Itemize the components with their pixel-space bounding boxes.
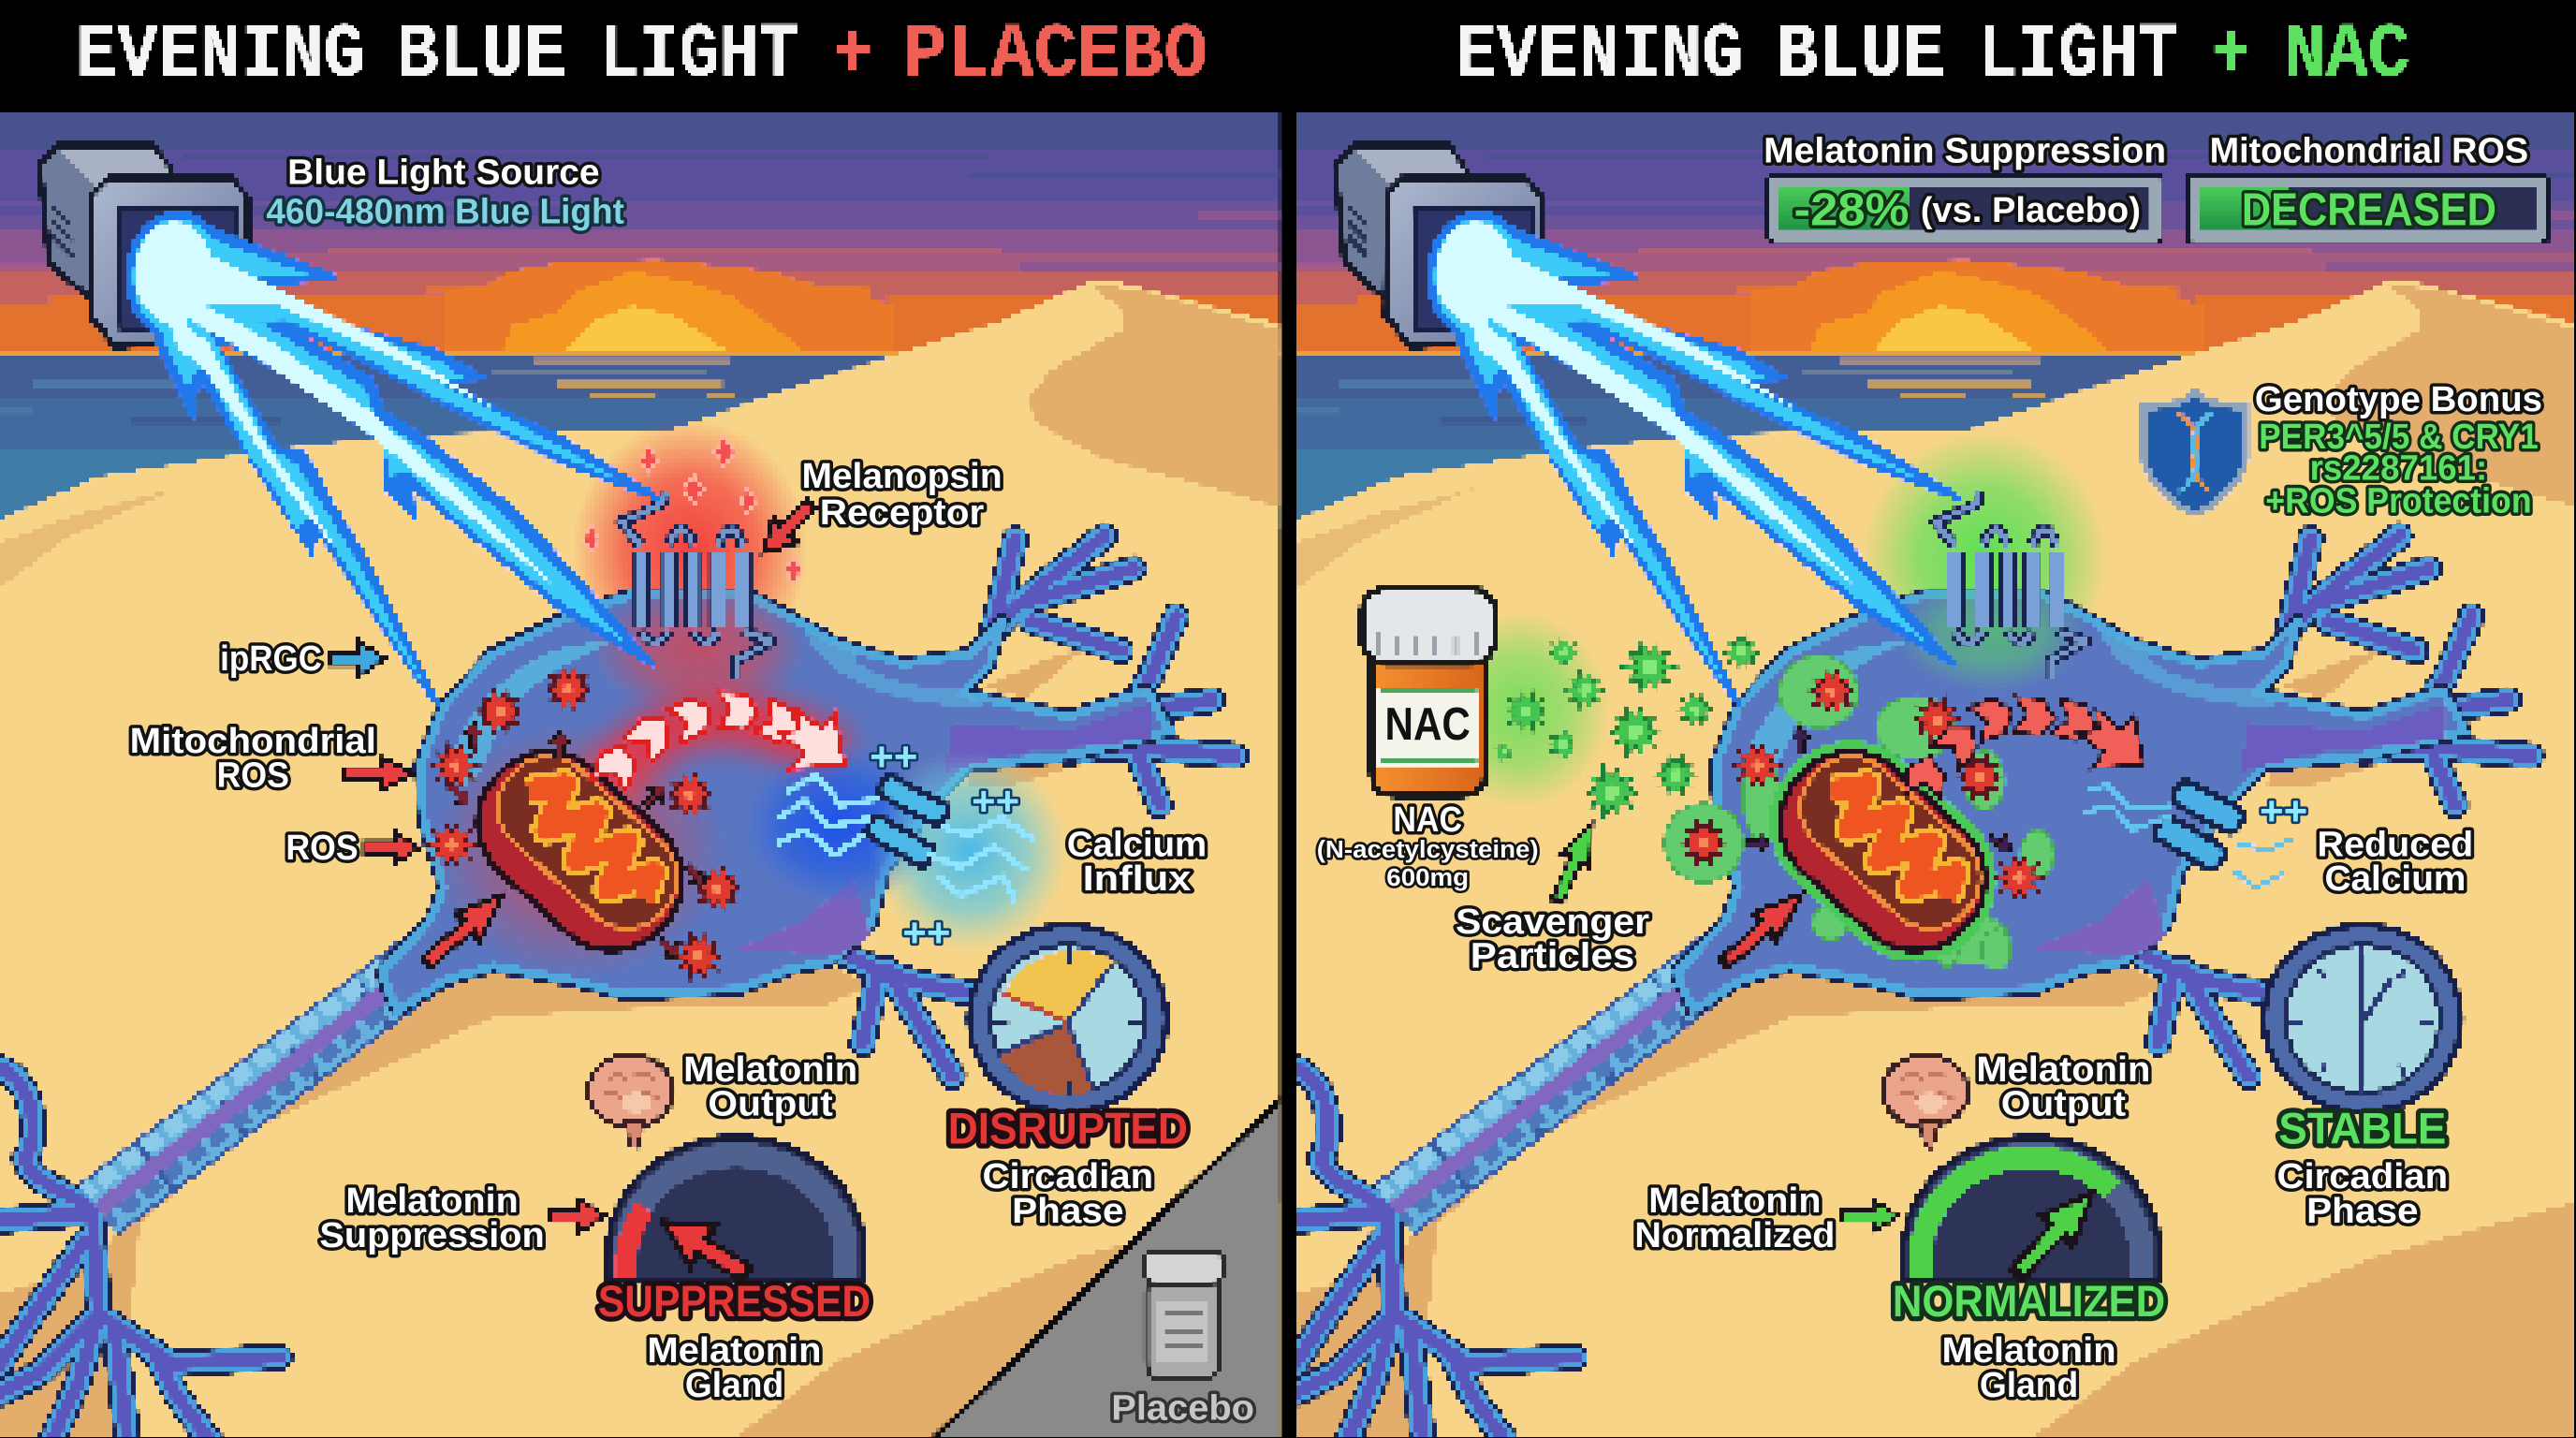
label: melatonin output: Melatonin (1976, 1049, 2150, 1089)
calcium channel (2152, 778, 2247, 873)
calcium ions: ++ (870, 734, 917, 780)
NAC scavenger blobs (1664, 655, 2054, 970)
label: genotype bonus: PER3^5/5 & CRY1 (2259, 417, 2539, 456)
calcium ions: ++ (902, 910, 950, 956)
melatonin gauge: suppressed (607, 1137, 864, 1293)
title: placebo panel: PLACEBO (903, 11, 1208, 99)
label: scavenger particles: Particles (1471, 936, 1634, 976)
callout arrows (330, 492, 825, 1232)
label: melanopsin receptor: Receptor (820, 492, 985, 532)
right panel: evening blue light + NAC (1258, 11, 2576, 1438)
label: NAC dose: NAC (1393, 800, 1462, 839)
calcium channel (863, 773, 951, 870)
sand dunes (0, 283, 1298, 1438)
scene artwork: NAC (1258, 98, 2576, 1438)
title: NAC panel: LIGHT (1978, 11, 2178, 99)
sand dunes (1281, 283, 2576, 1438)
label: calcium influx (1067, 824, 1207, 898)
label: melatonin output (683, 1049, 857, 1123)
scavenger particles (1494, 635, 1760, 817)
label: placebo: Placebo (1111, 1387, 1254, 1427)
label: reduced calcium: Reduced (2318, 824, 2473, 863)
sunset sky and sea (1258, 98, 2576, 531)
label: blue light source: Blue Light Source (287, 153, 600, 192)
label: genotype bonus (2255, 379, 2542, 521)
melanopsin receptor (1936, 490, 2086, 677)
status bars (1767, 174, 2548, 243)
dark arrows (1745, 726, 2017, 858)
label: circadian phase (2277, 1156, 2448, 1230)
label: reduced calcium: Calcium (2324, 858, 2466, 898)
label: circadian phase: Circadian (983, 1156, 1153, 1196)
label: mitochondrial ROS: Mitochondrial (130, 721, 376, 760)
label: genotype bonus: +ROS Protection (2265, 481, 2532, 521)
title: NAC panel: NAC (2284, 11, 2410, 99)
red chevron arrow arc (593, 693, 866, 793)
reduced calcium waves (2082, 785, 2291, 888)
label: ROS: ROS (285, 828, 359, 867)
melanopsin receptor red glow (576, 421, 805, 609)
label: melatonin suppression stat: -28% (1794, 184, 1909, 235)
sunset sky and sea (0, 98, 1331, 531)
label: circadian phase (983, 1156, 1153, 1230)
mitochondrion (1753, 726, 2012, 977)
label: blue light source (266, 153, 624, 231)
title: placebo panel (76, 11, 1208, 99)
label: melatonin suppression: Suppression (319, 1215, 545, 1255)
label: mitochondrial ROS: ROS (217, 756, 289, 795)
title: NAC panel (1456, 11, 2410, 99)
placebo corner (929, 1094, 1284, 1438)
red stress glow inside soma (431, 583, 838, 979)
calcium ions (870, 734, 1019, 956)
label: melatonin gland (1942, 1330, 2116, 1404)
reduced red arrow arc (1904, 694, 2165, 800)
label: melatonin normalized: Normalized (1634, 1215, 1835, 1255)
badge: normalized: NORMALIZED (1893, 1277, 2165, 1327)
neutralized ROS (1680, 670, 2042, 900)
bottle label: NAC: NAC (1385, 699, 1471, 750)
melanopsin receptor green glow (1862, 431, 2108, 687)
circadian clock: disrupted (970, 925, 1166, 1112)
calcium ions reduced: ++ (2260, 788, 2307, 834)
label: circadian phase: Phase (1012, 1191, 1123, 1230)
green receptor tint inside soma (1895, 574, 2086, 692)
label: melatonin suppression (319, 1181, 545, 1255)
label: genotype bonus: Genotype Bonus (2255, 379, 2542, 418)
label: melanopsin receptor (801, 456, 1003, 532)
label: reduced calcium (2318, 824, 2473, 898)
brain icon (1882, 1055, 1969, 1149)
calcium ions: ++ (972, 779, 1019, 825)
label: melatonin gland: Melatonin (1942, 1330, 2116, 1370)
title: placebo panel: LIGHT (600, 11, 798, 99)
label: genotype bonus: rs2287161: (2310, 448, 2487, 487)
label: mitochondrial ROS stat: DECREASED (2242, 184, 2496, 235)
ROS particles (429, 667, 741, 978)
placebo bottle (1144, 1251, 1224, 1380)
label: scavenger particles (1456, 902, 1649, 976)
label: melatonin output (1976, 1049, 2150, 1123)
label: scavenger particles: Scavenger (1456, 902, 1649, 941)
label: melatonin output: Output (708, 1084, 833, 1123)
ipRGC neuron (0, 536, 1236, 1438)
label: melatonin suppression stat: Melatonin Suppression (1764, 131, 2166, 170)
badge: disrupted: DISRUPTED (948, 1105, 1188, 1154)
label: melatonin suppression stat: (vs. Placebo) (1921, 190, 2141, 229)
title: placebo panel: EVENING (76, 11, 365, 99)
circadian clock: stable (2264, 925, 2461, 1112)
mitochondrion (473, 749, 683, 955)
blue light source (39, 144, 248, 346)
brain icon (588, 1055, 674, 1149)
genotype shield (2144, 388, 2246, 514)
label: melatonin output: Melatonin (683, 1049, 857, 1089)
melanopsin receptor (621, 490, 772, 677)
label: melatonin normalized: Melatonin (1648, 1181, 1822, 1220)
label: melatonin normalized (1634, 1181, 1835, 1255)
label: mitochondrial ROS (130, 721, 376, 795)
calcium waves (775, 775, 1035, 901)
title: NAC panel: EVENING (1456, 11, 1743, 99)
label: melatonin gland: Gland (685, 1365, 783, 1404)
scene artwork: placebo (0, 98, 1331, 1438)
label: NAC dose: 600mg (1386, 863, 1469, 891)
title: NAC panel: BLUE (1776, 11, 1945, 99)
label: melatonin gland: Melatonin (648, 1330, 822, 1370)
left panel: evening blue light + placebo (0, 11, 1331, 1438)
blue light beams (1429, 213, 1962, 707)
label: melatonin gland (648, 1330, 822, 1404)
label: circadian phase: Phase (2306, 1191, 2419, 1230)
label: ipRGC: ipRGC (220, 638, 322, 678)
title: NAC panel: + (2211, 11, 2250, 99)
label: calcium influx: Influx (1083, 858, 1191, 898)
NAC bottle (1362, 588, 1610, 809)
label: melanopsin receptor: Melanopsin (801, 456, 1003, 495)
label: melatonin suppression: Melatonin (345, 1181, 519, 1220)
label: melatonin gland: Gland (1980, 1365, 2078, 1404)
label: circadian phase: Circadian (2277, 1156, 2448, 1196)
title: placebo panel: BLUE (396, 11, 567, 99)
receptor sparkles (583, 437, 801, 583)
blue light beams (128, 213, 661, 707)
blue light source (1335, 144, 1544, 346)
label: mitochondrial ROS stat (2210, 131, 2528, 235)
badge: suppressed: SUPPRESSED (598, 1277, 871, 1327)
label: blue light source: 460-480nm Blue Light (266, 192, 624, 231)
callout arrows (1543, 817, 1898, 1232)
green halo around mitochondrion (1737, 709, 2028, 993)
label: melatonin output: Output (2001, 1084, 2127, 1123)
label: calcium influx: Calcium (1067, 824, 1207, 863)
label: NAC dose (1317, 800, 1539, 891)
label: melatonin suppression stat (1764, 131, 2166, 235)
small dark ROS arrows (445, 721, 711, 965)
ipRGC neuron (1295, 536, 2531, 1438)
badge: stable: STABLE (2278, 1105, 2446, 1154)
title: placebo panel: + (833, 11, 872, 99)
label: mitochondrial ROS stat: Mitochondrial ROS (2210, 131, 2528, 170)
melatonin gauge: normalized (1903, 1137, 2159, 1288)
label: NAC dose: (N-acetylcysteine) (1317, 835, 1539, 863)
calcium glow (754, 749, 1062, 950)
